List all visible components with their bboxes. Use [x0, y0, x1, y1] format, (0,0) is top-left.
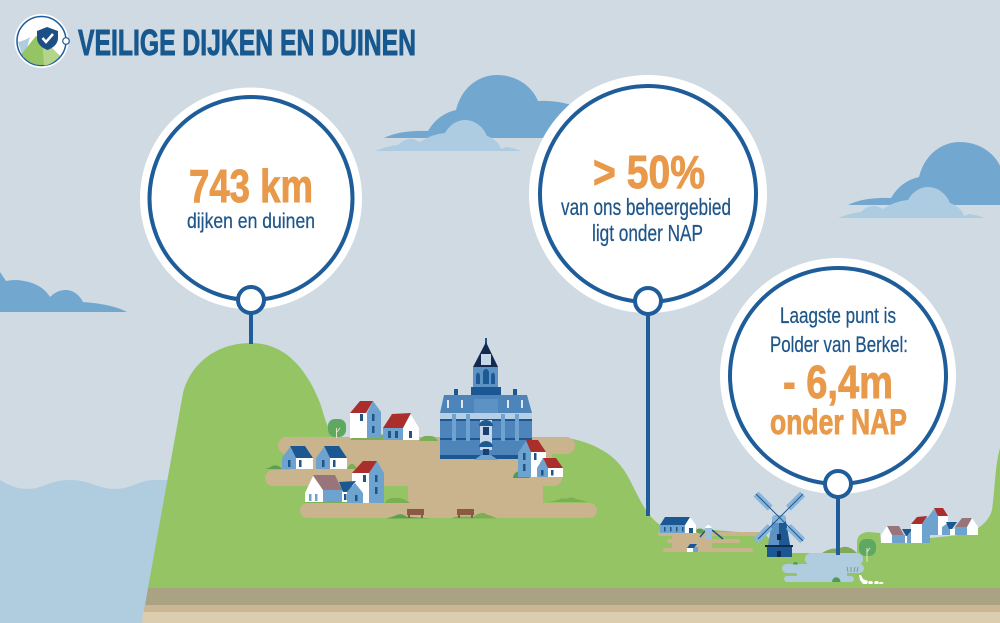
village: dirt roads — [265, 437, 597, 518]
ducks — [859, 575, 884, 584]
callout 3: lowest point: Laagste punt is — [780, 303, 896, 328]
small farm house — [687, 544, 698, 552]
callout 2: more than 50 percent: van ons beheergebied — [561, 194, 731, 220]
callout 1: 743 km: dijken en duinen — [187, 210, 315, 233]
house: tall red roof — [352, 461, 384, 503]
soil layers — [142, 588, 1000, 623]
house: small blue roof — [339, 481, 363, 503]
callout 1: 743 km — [140, 88, 362, 344]
house: right of town hall, small — [537, 458, 563, 477]
playground slide and water tower — [696, 525, 723, 539]
cloud: top right — [838, 142, 1000, 218]
house: white and blue with red roof — [350, 401, 381, 438]
house: mauve roof — [305, 475, 342, 502]
right village houses — [881, 508, 978, 543]
village: bushes — [265, 433, 587, 518]
house: right of town hall, tall — [518, 440, 546, 477]
callout 3: lowest point: Polder van Berkel: — [770, 332, 908, 357]
callout 2: more than 50 percent: ligt onder NAP — [592, 220, 703, 246]
farm dirt paths — [658, 532, 760, 552]
village: tree — [328, 419, 346, 438]
cloud: top centre — [375, 75, 600, 151]
callout 2: more than 50 percent — [529, 75, 767, 516]
water: sea left of dike — [0, 480, 170, 623]
title: VEILIGE DIJKEN EN DUINEN — [78, 22, 416, 63]
icon: logo with shield and dike — [14, 14, 69, 68]
cloud: left — [0, 272, 127, 312]
small hills behind pond — [822, 547, 857, 553]
green dike landscape — [148, 343, 1000, 588]
house: blue and white with red roof — [383, 413, 419, 440]
callout 3: lowest point: - 6,4m — [783, 356, 893, 408]
callout 3: lowest point — [720, 258, 956, 555]
callout 1: 743 km: 743 km — [189, 160, 313, 212]
callout 2: more than 50 percent: > 50% — [593, 146, 705, 198]
benches — [407, 509, 474, 518]
house: blue roof two — [316, 446, 347, 469]
windmill — [753, 491, 805, 557]
farm barn — [660, 517, 696, 533]
house: blue roof one — [282, 446, 313, 469]
pond plants and reeds — [793, 562, 858, 582]
pond — [782, 553, 864, 582]
pond tree — [859, 539, 876, 562]
callout 3: lowest point: onder NAP — [770, 403, 907, 442]
town hall — [440, 338, 532, 460]
